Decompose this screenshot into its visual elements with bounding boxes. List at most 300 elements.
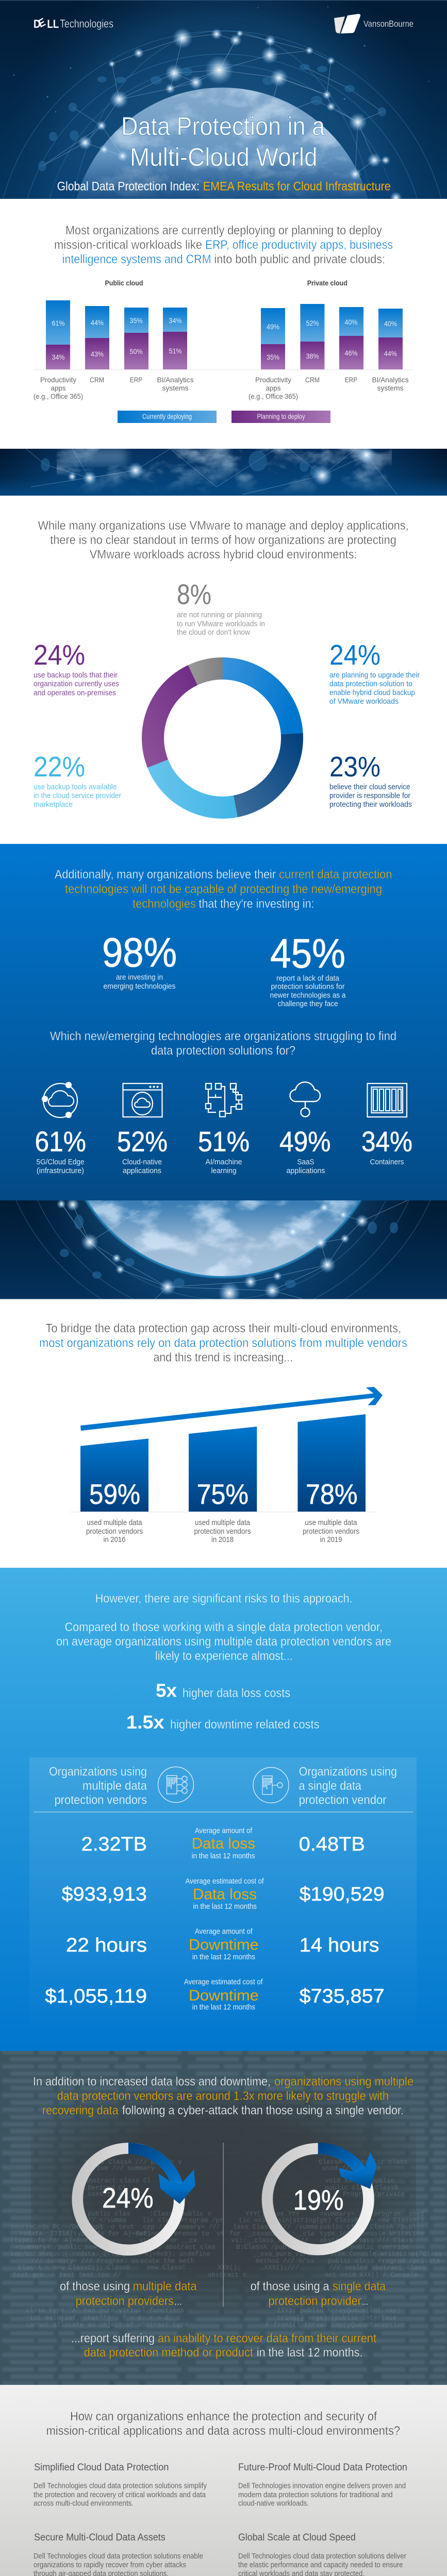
row: cost of data loss: Data loss: [193, 1886, 257, 1903]
feature: simplified cloud data protection: Simplified Cloud Data Protection: [34, 2462, 169, 2473]
code background texture: :ClassA public o: [150, 2211, 211, 2218]
code background texture: __cxa_pure_virtu: [252, 2251, 314, 2258]
logo: Dell Technologies: D: [34, 19, 41, 30]
panel: cyber-attack recovery: [0, 2051, 447, 2385]
chart: public cloud stacked bars: 61%: [52, 319, 65, 327]
stat: 98 percent: [102, 929, 177, 991]
icon: 5G cloud edge: [42, 1082, 77, 1117]
code background texture: class type 'A' has pure virtual functions: [26, 2307, 185, 2314]
chart: private cloud stacked bars: 44%: [384, 349, 397, 358]
feature: simplified cloud data protection: Dell Technologies cloud data protection solutions simplify: [34, 2482, 207, 2490]
feature: simplified cloud data protection: the protection and recovery of critical workloads and data: [34, 2490, 206, 2499]
heading: bridging the gap: and this trend is increasing...: [154, 1351, 293, 1364]
feature: global scale: Global Scale at Cloud Speed: [238, 2532, 356, 2543]
chart: private cloud stacked bars: 35%: [267, 353, 279, 361]
column header: single vendor: Organizations using: [299, 1765, 397, 1778]
code background texture: define reference to `vt: [136, 2230, 225, 2238]
code background texture: void XXX(); public: [325, 2177, 394, 2184]
heading: significant risks: [56, 1592, 391, 1663]
stats: technology percentages: 49%: [279, 1125, 331, 1157]
row: cost of downtime: [45, 1978, 385, 2012]
code background texture: lic class Program /pr: [142, 2217, 224, 2224]
icon: server with one vendor: [253, 1767, 289, 1803]
heading: bridging the gap: [39, 1321, 407, 1364]
conclusion text: ...report suffering: [71, 2331, 155, 2345]
code background texture: test gcc -o test test.cpp //: [13, 2272, 121, 2279]
code background texture: // </summa: [88, 2217, 127, 2224]
stat: 98 percent: emerging technologies: [103, 982, 175, 991]
code background texture: YYY() base.YYY: [245, 2211, 300, 2218]
stat: 24 percent upgrading: are planning to upgrade their: [329, 671, 420, 680]
image band: earth lower limb with network: [0, 1200, 447, 1299]
heading: cloud deployment intro: ERP, office productivity apps, business: [205, 238, 393, 252]
code background texture: abstract c: [208, 2272, 246, 2279]
chart: private cloud stacked bars: 38%: [306, 352, 319, 360]
code background texture: gs) ClassB b = new ClassB();: [320, 2217, 428, 2224]
heading: cloud deployment intro: mission-critical workloads like: [54, 238, 202, 252]
column header: single vendor: protection vendor: [299, 1793, 387, 1807]
heading: recovery struggle: data protection vendors are around 1.3x more likely to struggle with: [57, 2089, 389, 2103]
code background texture: /// sealed abstract class: [329, 2264, 426, 2272]
chart: private cloud stacked bars: BI/Analytics: [372, 376, 408, 384]
stat: 98 percent: 98%: [102, 929, 177, 975]
chart: private cloud stacked bars: 40%: [344, 318, 358, 326]
heading: enhance protection question: mission-critical applications and data across multi-cloud environments?: [46, 2424, 400, 2438]
stats: technology percentages: Cloud-native: [122, 1158, 162, 1166]
stat: 24 percent on-premises tools: and operates on-premises: [34, 688, 116, 698]
conclusion text: [71, 2331, 376, 2360]
logo: Dell Technologies: E: [37, 16, 47, 30]
subtitle: Global Data Protection Index:: [57, 179, 200, 193]
heading: VMware intro: While many organizations use VMware to manage and deploy applications,: [38, 519, 409, 533]
row: amount of downtime: 14 hours: [300, 1935, 379, 1956]
stat: 22 percent marketplace: marketplace: [34, 800, 73, 809]
code background texture: [10, 2159, 442, 2329]
feature: secure data assets: [34, 2532, 203, 2576]
row: cost of data loss: $190,529: [300, 1884, 385, 1905]
legend: Currently deploying: [142, 413, 192, 420]
heading: cloud deployment intro: intelligence systems and CRM: [62, 252, 211, 266]
chart: private cloud stacked bars: ERP: [345, 376, 357, 384]
logo: Dell Technologies: [34, 16, 113, 30]
stat: 24 percent on-premises tools: [34, 639, 119, 698]
stats: technology percentages: 51%: [198, 1125, 250, 1157]
stat: 5x data loss costs: higher data loss costs: [183, 1686, 290, 1700]
code background texture: abstract class /// Class: [320, 2237, 412, 2244]
feature: simplified cloud data protection: [34, 2462, 207, 2508]
code background texture: ClassA = new ClassC(); ClassB: [18, 2264, 130, 2272]
code background texture: vtable for __cx: [139, 2237, 197, 2244]
image band: earth close-up: [0, 446, 447, 496]
stat: 45 percent: [270, 930, 346, 1008]
feature: future-proof protection: Future-Proof Multi-Cloud Data Protection: [238, 2462, 407, 2473]
icon: cloud-native application window: [123, 1083, 162, 1117]
column header: multiple vendors: Organizations using: [49, 1765, 147, 1778]
chart: private cloud stacked bars: CRM: [305, 376, 320, 384]
feature: secure data assets: Dell Technologies cloud data protection solutions enable: [34, 2552, 203, 2561]
heading: cloud deployment intro: into both public and private clouds:: [214, 252, 385, 266]
heading: recovery struggle: [33, 2075, 413, 2117]
stat: 24 percent upgrading: 24%: [329, 639, 380, 671]
stat: 23 percent cloud provider responsible: [329, 751, 412, 809]
code background texture: public class ClassA /public: [320, 2224, 424, 2231]
heading: significant risks: likely to experience almost...: [155, 1649, 293, 1663]
stat: 24 percent upgrading: [329, 639, 420, 706]
code background texture: public abstract clas: [138, 2244, 216, 2251]
chart: public cloud stacked bars: CRM: [90, 376, 104, 384]
column header: multiple vendors: protection vendors: [55, 1793, 147, 1807]
chart: public cloud stacked bars: Public cloud: [105, 279, 143, 287]
row: cost of downtime: in the last 12 months: [192, 2003, 255, 2012]
chart: private cloud stacked bars: [249, 279, 408, 400]
code background texture: B:ClassA /public: [236, 2244, 298, 2251]
code background texture: tmp/ccEdRxq.o:(.rodata._ZTV1A[v: [10, 2251, 130, 2258]
code background texture: for __cxxabiv1 ::__cla: [229, 2230, 315, 2238]
stat: 45 percent: protection solutions for: [271, 982, 344, 991]
code background texture: or A]+0x8): undefine: [133, 2251, 210, 2258]
chart: multi-vendor trend bars: 59%: [89, 1478, 140, 1510]
heading: recovery struggle: following a cyber-attack than those using a single vendor.: [122, 2104, 404, 2117]
chart: public cloud stacked bars: 50%: [130, 347, 142, 355]
stat: 8 percent: [177, 579, 265, 637]
icon: SaaS cloud: [290, 1082, 320, 1117]
panel: how to enhance protection: [0, 2385, 447, 2576]
feature: global scale: Dell Technologies cloud data protection solutions deliver: [238, 2552, 406, 2561]
conclusion text: in the last 12 months.: [257, 2346, 363, 2360]
row: cost of downtime: Downtime: [189, 1987, 259, 2004]
code background texture: used /// method: [322, 2165, 380, 2172]
conclusion text: data protection method or product: [84, 2346, 253, 2360]
legend: [118, 411, 330, 423]
feature: future-proof protection: modern data protection solutions for traditional and: [238, 2490, 393, 2499]
chart: multi-vendor trend bars: in 2018: [211, 1535, 234, 1544]
stat: 45 percent: newer technologies as a: [270, 991, 346, 999]
column header: single vendor: a single data: [299, 1779, 361, 1793]
stat: 8 percent: are not running or planning: [177, 611, 262, 619]
code background texture: Derived Cl: [88, 2184, 126, 2192]
chart: multi-vendor trend bars: in 2019: [320, 1535, 342, 1544]
chart: multi-vendor trend bars: protection vendors: [303, 1527, 359, 1536]
icon: containers: [367, 1083, 407, 1117]
row: amount of data loss: 0.48TB: [299, 1834, 365, 1855]
stats: technology percentages: AI/machine: [205, 1158, 242, 1166]
chart: public cloud stacked bars: ERP: [130, 376, 142, 384]
column header: multiple vendors: multiple data: [82, 1779, 147, 1793]
row: amount of data loss: [81, 1826, 365, 1860]
column header: multiple vendors: [49, 1765, 147, 1807]
column header: single vendor: [299, 1765, 397, 1807]
logo: Vanson Bourne: VansonBourne: [363, 19, 413, 29]
row: amount of downtime: in the last 12 months: [192, 1953, 255, 1961]
feature: secure data assets: organizations to rapidly recover from cyber attacks: [34, 2561, 186, 2569]
code background texture: class ClassA /// public v: [85, 2159, 182, 2166]
code background texture: (typeinfo for A]+0x0):: [10, 2237, 95, 2244]
heading: VMware intro: [38, 519, 409, 562]
chart: public cloud stacked bars: Productivity: [40, 376, 76, 384]
chart: private cloud stacked bars: 49%: [267, 323, 279, 331]
icon: server with three vendors: [158, 1767, 194, 1802]
code background texture: .XXX();///: [260, 2264, 299, 2272]
stat: 22 percent marketplace: in the cloud service provider: [34, 791, 121, 800]
chart: multi-vendor trend bars: used multiple data: [87, 1518, 142, 1527]
heading: bridging the gap: To bridge the data protection gap across their multi-cloud environments,: [45, 1321, 401, 1335]
subtitle: [57, 179, 391, 193]
caption: multiple vendors: multiple data: [133, 2280, 197, 2294]
stats: technology percentages: 52%: [117, 1125, 168, 1157]
chart: public cloud stacked bars: 44%: [91, 318, 104, 327]
stat: 24 percent on-premises tools: use backup tools that their: [34, 671, 118, 680]
row: amount of data loss: 2.32TB: [81, 1834, 147, 1855]
heading: bridging the gap: most organizations rely on data protection solutions from multiple vendors: [39, 1336, 407, 1350]
heading: VMware intro: VMware workloads across hybrid cloud environments:: [90, 548, 357, 562]
ring chart: 19 percent: [267, 2143, 377, 2250]
stat: 24 percent upgrading: of VMware workloads: [329, 697, 399, 706]
panel: comparison table: [29, 1757, 417, 2025]
chart: multi-vendor trend bars: protection vendors: [194, 1527, 251, 1536]
heading: which technologies: data protection solutions for?: [151, 1044, 295, 1058]
heading: cloud deployment intro: Most organizations are currently deploying or planning to deploy: [65, 224, 382, 238]
code background texture: used to x: [88, 2191, 123, 2198]
chart: multi-vendor trend bars: 78%: [306, 1478, 358, 1510]
code background texture: .XXX();: [214, 2264, 241, 2272]
heading: cloud deployment intro: [54, 224, 393, 266]
feature: simplified cloud data protection: across multi-cloud environments.: [34, 2499, 134, 2508]
chart: public cloud stacked bars: 51%: [169, 347, 181, 355]
feature: future-proof protection: [238, 2462, 407, 2508]
chart: multi-vendor trend bars: in 2016: [103, 1535, 126, 1544]
stat: 45 percent: report a lack of data: [276, 974, 340, 983]
stat: 24 percent upgrading: data protection solution to: [329, 680, 412, 688]
code background texture: abstract class Cl: [85, 2177, 151, 2184]
donut chart: VMware protection: [142, 657, 303, 819]
code background texture: .cpp /// summary> ///: [139, 2224, 221, 2231]
code background texture: Program /private: [343, 2191, 405, 2198]
stat: 8 percent: the cloud or don't know: [177, 628, 250, 637]
subtitle: EMEA Results for Cloud Infrastructure: [203, 179, 391, 193]
stats: technology percentages: SaaS: [297, 1158, 314, 1166]
stat: 23 percent cloud provider responsible: protecting their workloads: [329, 800, 412, 809]
heading: enhance protection question: How can organizations enhance the protection and security of: [70, 2410, 377, 2424]
row: amount of data loss: Data loss: [192, 1835, 255, 1852]
logo: Dell Technologies: LL: [47, 19, 59, 30]
heading: current technologies not capable: current data protection: [279, 868, 392, 882]
code background texture: lass ClassA /// /summa: [233, 2224, 319, 2231]
chart: multi-vendor trend bars: [70, 1414, 376, 1544]
code background texture: <summary> /public new abstr: [15, 2244, 120, 2251]
logo: Vanson Bourne: [334, 14, 413, 33]
code background texture: stem.Console.WriteLine("Class: [330, 2251, 442, 2258]
chart: public cloud stacked bars: 34%: [52, 353, 65, 361]
caption: multiple vendors: ...: [174, 2294, 182, 2308]
feature: future-proof protection: Dell Technologies innovation engine delivers proven and: [238, 2482, 406, 2490]
heading: which technologies: [50, 1029, 396, 1058]
row: cost of downtime: Average estimated cost of: [184, 1978, 263, 1987]
feature: global scale: the elastic performance and capacity needed to ensure: [238, 2561, 403, 2569]
chart: public cloud stacked bars: [34, 279, 194, 400]
caption: single vendor: of those using a: [251, 2280, 329, 2294]
stats: technology percentages: applications: [123, 1166, 161, 1175]
caption: single vendor: single data: [333, 2280, 386, 2294]
row: cost of downtime: $735,857: [300, 1986, 385, 2007]
code background texture: ITY); public ArrayQueue(int cap): [277, 2307, 401, 2314]
chart: multi-vendor trend bars: used multiple data: [195, 1518, 251, 1527]
panel: hero banner: [0, 0, 447, 199]
heading: significant risks: on average organizations using multiple data protection vendors are: [56, 1635, 391, 1649]
caption: single vendor: [251, 2280, 386, 2308]
heading: recovery struggle: In addition to increased data loss and downtime,: [33, 2075, 271, 2089]
code background texture: new ClassC: [147, 2264, 186, 2272]
heading: recovery struggle: recovering data: [42, 2104, 119, 2117]
code background texture: ClassA /// public class: [319, 2159, 408, 2166]
heading: significant risks: However, there are significant risks to this approach.: [95, 1592, 353, 1606]
chart: public cloud stacked bars: 43%: [91, 350, 104, 358]
stat: 8 percent: 8%: [177, 579, 211, 611]
caption: multiple vendors: of those using: [60, 2280, 130, 2294]
stats: technology percentages: 5G/Cloud Edge: [36, 1158, 85, 1166]
conclusion text: an inability to recover data from their current: [158, 2331, 376, 2345]
icon: AI machine learning network: [206, 1083, 242, 1117]
stat: 24 percent on-premises tools: organization currently uses: [34, 680, 119, 688]
caption: multiple vendors: [60, 2280, 197, 2308]
heading: current technologies not capable: [55, 868, 392, 911]
chart: private cloud stacked bars: 40%: [384, 319, 397, 328]
title: Data Protection in a: [121, 112, 325, 141]
heading: recovery struggle: organizations using multiple: [274, 2075, 413, 2089]
code background texture: public class Program /private: [328, 2258, 440, 2265]
stats: technology percentages: Containers: [370, 1158, 404, 1166]
feature: secure data assets: Secure Multi-Cloud Data Assets: [34, 2532, 165, 2543]
caption: single vendor: protection provider: [268, 2294, 361, 2308]
heading: which technologies: Which new/emerging technologies are organizations struggling to find: [50, 1029, 396, 1043]
caption: single vendor: ...: [362, 2294, 368, 2308]
code background texture: public clas: [88, 2211, 130, 2218]
heading: current technologies not capable: technologies will not be capable of protecting the new/emerging: [65, 883, 382, 896]
code background texture: tic void Main(string[: [239, 2217, 320, 2224]
heading: current technologies not capable: that they're investing in:: [199, 897, 314, 911]
row: cost of data loss: Average estimated cost of: [186, 1877, 264, 1886]
caption: multiple vendors: protection providers: [76, 2294, 174, 2308]
code background texture: .rodata._ZTI1B[typeinfo for A]+0x0): [15, 2230, 151, 2238]
code background texture: 'int main(int, char**)': f = 0; r = 0; s: [26, 2314, 180, 2321]
logo: Dell Technologies: Technologies: [60, 18, 113, 30]
chart: multi-vendor trend bars: protection vendors: [86, 1527, 143, 1536]
stat: 1.5x downtime costs: 1.5x: [126, 1711, 164, 1733]
code background texture: sourceCode PC:~/Desktop$ -o test: [10, 2224, 134, 2231]
stats: technology percentages: learning: [211, 1166, 236, 1175]
chart: private cloud stacked bars: systems: [377, 384, 403, 392]
chart: public cloud stacked bars: (e.g., Office 365): [34, 392, 83, 400]
stat: 8 percent: to run VMware workloads in: [177, 619, 265, 629]
row: cost of data loss: [62, 1877, 385, 1911]
code background texture: act void XXX() / Console: [325, 2272, 418, 2279]
code background texture: Derive /// summary: [85, 2165, 155, 2172]
code background texture: tring[] args) {public interface: [277, 2314, 397, 2321]
chart: private cloud stacked bars: (e.g., Office 365): [249, 392, 298, 400]
panel: risks of multiple vendors: [0, 1568, 447, 2051]
stat: 45 percent: 45%: [270, 930, 345, 976]
code background texture: /// summary> /// Program: us: [31, 2258, 139, 2265]
chart: private cloud stacked bars: Private cloud: [307, 279, 347, 287]
code background texture: ClassB /public override: [320, 2244, 409, 2251]
code background texture: v1::__class_type ///: [231, 2237, 308, 2244]
stat: 5x data loss costs: 5x: [156, 1680, 177, 1701]
feature: future-proof protection: cloud-native workloads.: [238, 2499, 309, 2508]
chart: public cloud stacked bars: BI/Analytics: [157, 376, 194, 384]
ring chart: 24 percent: 24%: [102, 2182, 154, 2214]
stat: 22 percent marketplace: [34, 751, 121, 809]
code background texture: F front() throws EmptyQueueException: [266, 2321, 405, 2329]
chart: private cloud stacked bars: apps: [266, 384, 280, 392]
code background texture: <summary> /// program: used: [320, 2211, 424, 2218]
legend: Planning to deploy: [257, 413, 305, 420]
chart: public cloud stacked bars: systems: [162, 384, 189, 392]
row: amount of data loss: in the last 12 months: [192, 1852, 255, 1860]
stat: 22 percent marketplace: use backup tools available: [34, 783, 117, 791]
row: cost of downtime: $1,055,119: [45, 1986, 147, 2007]
stat: 1.5x downtime costs: [126, 1711, 320, 1733]
stat: 23 percent cloud provider responsible: 23%: [329, 751, 380, 783]
stats: technology percentages: [35, 1125, 412, 1175]
panel: emerging technologies: [0, 844, 447, 1200]
chart: public cloud stacked bars: apps: [51, 384, 66, 392]
code background texture: public class ClassB: [325, 2184, 399, 2192]
ring chart: 19 percent: 19%: [293, 2184, 343, 2216]
code background texture: cannot allocate an object of abstract type: [26, 2321, 188, 2329]
code background texture: ecute the meth: [140, 2258, 194, 2265]
row: amount of downtime: Downtime: [189, 1937, 259, 1954]
row: amount of downtime: [66, 1927, 379, 1961]
title: Multi-Cloud World: [130, 143, 318, 172]
chart: multi-vendor trend bars: 75%: [197, 1478, 249, 1510]
chart: public cloud stacked bars: 34%: [169, 316, 181, 325]
stat: 1.5x downtime costs: higher downtime related costs: [170, 1718, 320, 1732]
chart: private cloud stacked bars: Productivity: [255, 376, 291, 384]
heading: VMware intro: there is no clear standout in terms of how organizations are protecting: [50, 533, 396, 547]
row: amount of downtime: 22 hours: [66, 1935, 147, 1956]
heading: current technologies not capable: Additionally, many organizations believe their: [55, 868, 276, 882]
chart: private cloud stacked bars: 52%: [306, 319, 319, 327]
stats: technology percentages: 34%: [361, 1125, 412, 1157]
arrow: rising trend: [80, 1387, 383, 1431]
stats: technology percentages: 61%: [35, 1125, 86, 1157]
stat: 22 percent marketplace: 22%: [34, 751, 85, 783]
ring chart: 24 percent: [77, 2143, 195, 2250]
stat: 45 percent: challenge they face: [277, 999, 338, 1008]
heading: enhance protection question: [46, 2410, 400, 2438]
chart: public cloud stacked bars: 35%: [130, 316, 142, 325]
heading: significant risks: Compared to those working with a single data protection vendor,: [65, 1620, 383, 1634]
stat: 23 percent cloud provider responsible: believe their cloud service: [329, 783, 410, 791]
heading: current technologies not capable: technologies: [133, 897, 196, 911]
row: amount of data loss: Average amount of: [195, 1826, 253, 1835]
title: [121, 112, 325, 172]
row: cost of data loss: in the last 12 months: [193, 1902, 257, 1911]
code background texture: method /// </su: [256, 2258, 314, 2265]
chart: private cloud stacked bars: 46%: [344, 349, 358, 357]
stats: technology percentages: (infrastructure): [37, 1166, 84, 1175]
chart: multi-vendor trend bars: use multiple data: [305, 1518, 357, 1527]
stat: 5x data loss costs: [156, 1680, 290, 1701]
stat: 23 percent cloud provider responsible: provider is responsible for: [329, 791, 410, 800]
stat: 98 percent: are investing in: [116, 973, 163, 982]
stat: 24 percent on-premises tools: 24%: [34, 639, 85, 671]
row: cost of data loss: $933,913: [62, 1884, 147, 1905]
row: amount of downtime: Average amount of: [195, 1927, 253, 1936]
code background texture: type_info console.WriteLine: [320, 2230, 424, 2238]
stat: 24 percent upgrading: enable hybrid cloud backup: [329, 688, 415, 697]
stats: technology percentages: applications: [287, 1166, 325, 1175]
feature: global scale: [238, 2532, 406, 2576]
